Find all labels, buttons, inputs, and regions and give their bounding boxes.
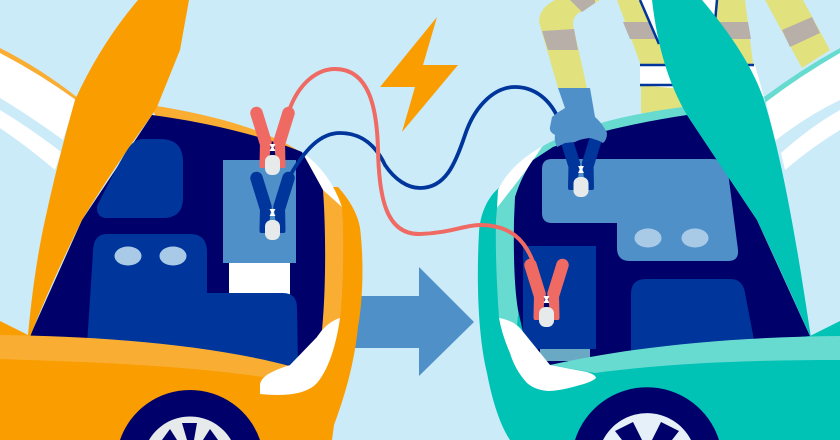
right battery [523, 246, 596, 349]
right headlight [499, 318, 596, 391]
right car body [478, 187, 840, 440]
blue clamp on right car [565, 135, 597, 197]
blue clamp on left car [256, 178, 288, 240]
left car white trim [302, 152, 342, 207]
right engine bay [514, 115, 810, 365]
right car raised hood [652, 0, 811, 338]
red jumper cable [290, 69, 533, 262]
right wheel [575, 387, 719, 440]
red clamp on right car [530, 265, 562, 327]
left car raised hood [28, 0, 189, 337]
gloved hand [550, 88, 607, 147]
left battery white base [229, 262, 290, 296]
left upper block [97, 139, 183, 218]
right pale battery base [540, 345, 590, 361]
left engine bay [30, 115, 325, 368]
left car windshield [0, 48, 78, 170]
right lower block [631, 279, 754, 351]
vest [640, 0, 717, 43]
left car inner trim [150, 105, 343, 340]
lightning bolt [380, 17, 458, 132]
shirt torso [617, 0, 753, 113]
right upper block [542, 159, 738, 261]
left car [0, 0, 362, 440]
left headlight [260, 318, 340, 395]
right car top trim [533, 106, 692, 160]
left battery [223, 160, 296, 263]
right car [478, 0, 840, 440]
left hood lip [0, 335, 290, 377]
left wheel [120, 390, 260, 440]
right hood lip [550, 336, 840, 373]
mechanic behind right car [539, 0, 830, 113]
left lower block [87, 234, 298, 366]
arrow [340, 267, 474, 376]
red clamp on left car [256, 113, 288, 175]
right car inner trim [496, 160, 534, 345]
left arm sleeve [539, 0, 600, 88]
right car windshield [764, 48, 840, 170]
left car body [0, 187, 362, 440]
right car white trim [497, 147, 541, 208]
right arm sleeve [765, 0, 830, 68]
right terminal caps [634, 228, 708, 248]
blue jumper cable [291, 87, 558, 188]
left terminal caps [114, 246, 186, 266]
